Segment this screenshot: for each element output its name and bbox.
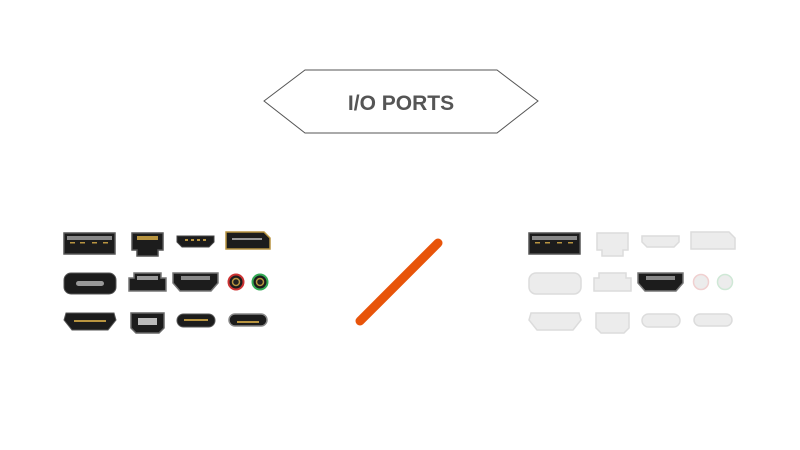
title banner: I/O PORTS bbox=[348, 92, 454, 115]
icon: HDMI bbox=[173, 273, 218, 291]
icon: mini USB bbox=[129, 273, 166, 291]
arrow: orange slash bbox=[360, 243, 438, 321]
icon: DisplayPort bbox=[226, 232, 270, 249]
icon: RJ45 bbox=[132, 233, 163, 256]
icon: Lightning-style port bbox=[64, 273, 116, 294]
icon: HDMI highlighted bbox=[638, 273, 683, 291]
panel: colored ports grid bbox=[64, 232, 270, 333]
icon: micro USB bbox=[177, 236, 214, 247]
icon: USB-A highlighted bbox=[529, 233, 580, 254]
faded icons bbox=[529, 232, 735, 333]
icon: USB-C 2 bbox=[229, 314, 267, 326]
icon: HDMI mini bbox=[64, 313, 116, 330]
icon: USB-A bbox=[64, 233, 115, 254]
panel: faded ports grid bbox=[529, 232, 735, 333]
icon: USB-C bbox=[177, 314, 215, 327]
icon: mini DisplayPort bbox=[131, 313, 164, 333]
icon: audio jacks bbox=[228, 274, 268, 290]
title banner bbox=[264, 70, 538, 133]
